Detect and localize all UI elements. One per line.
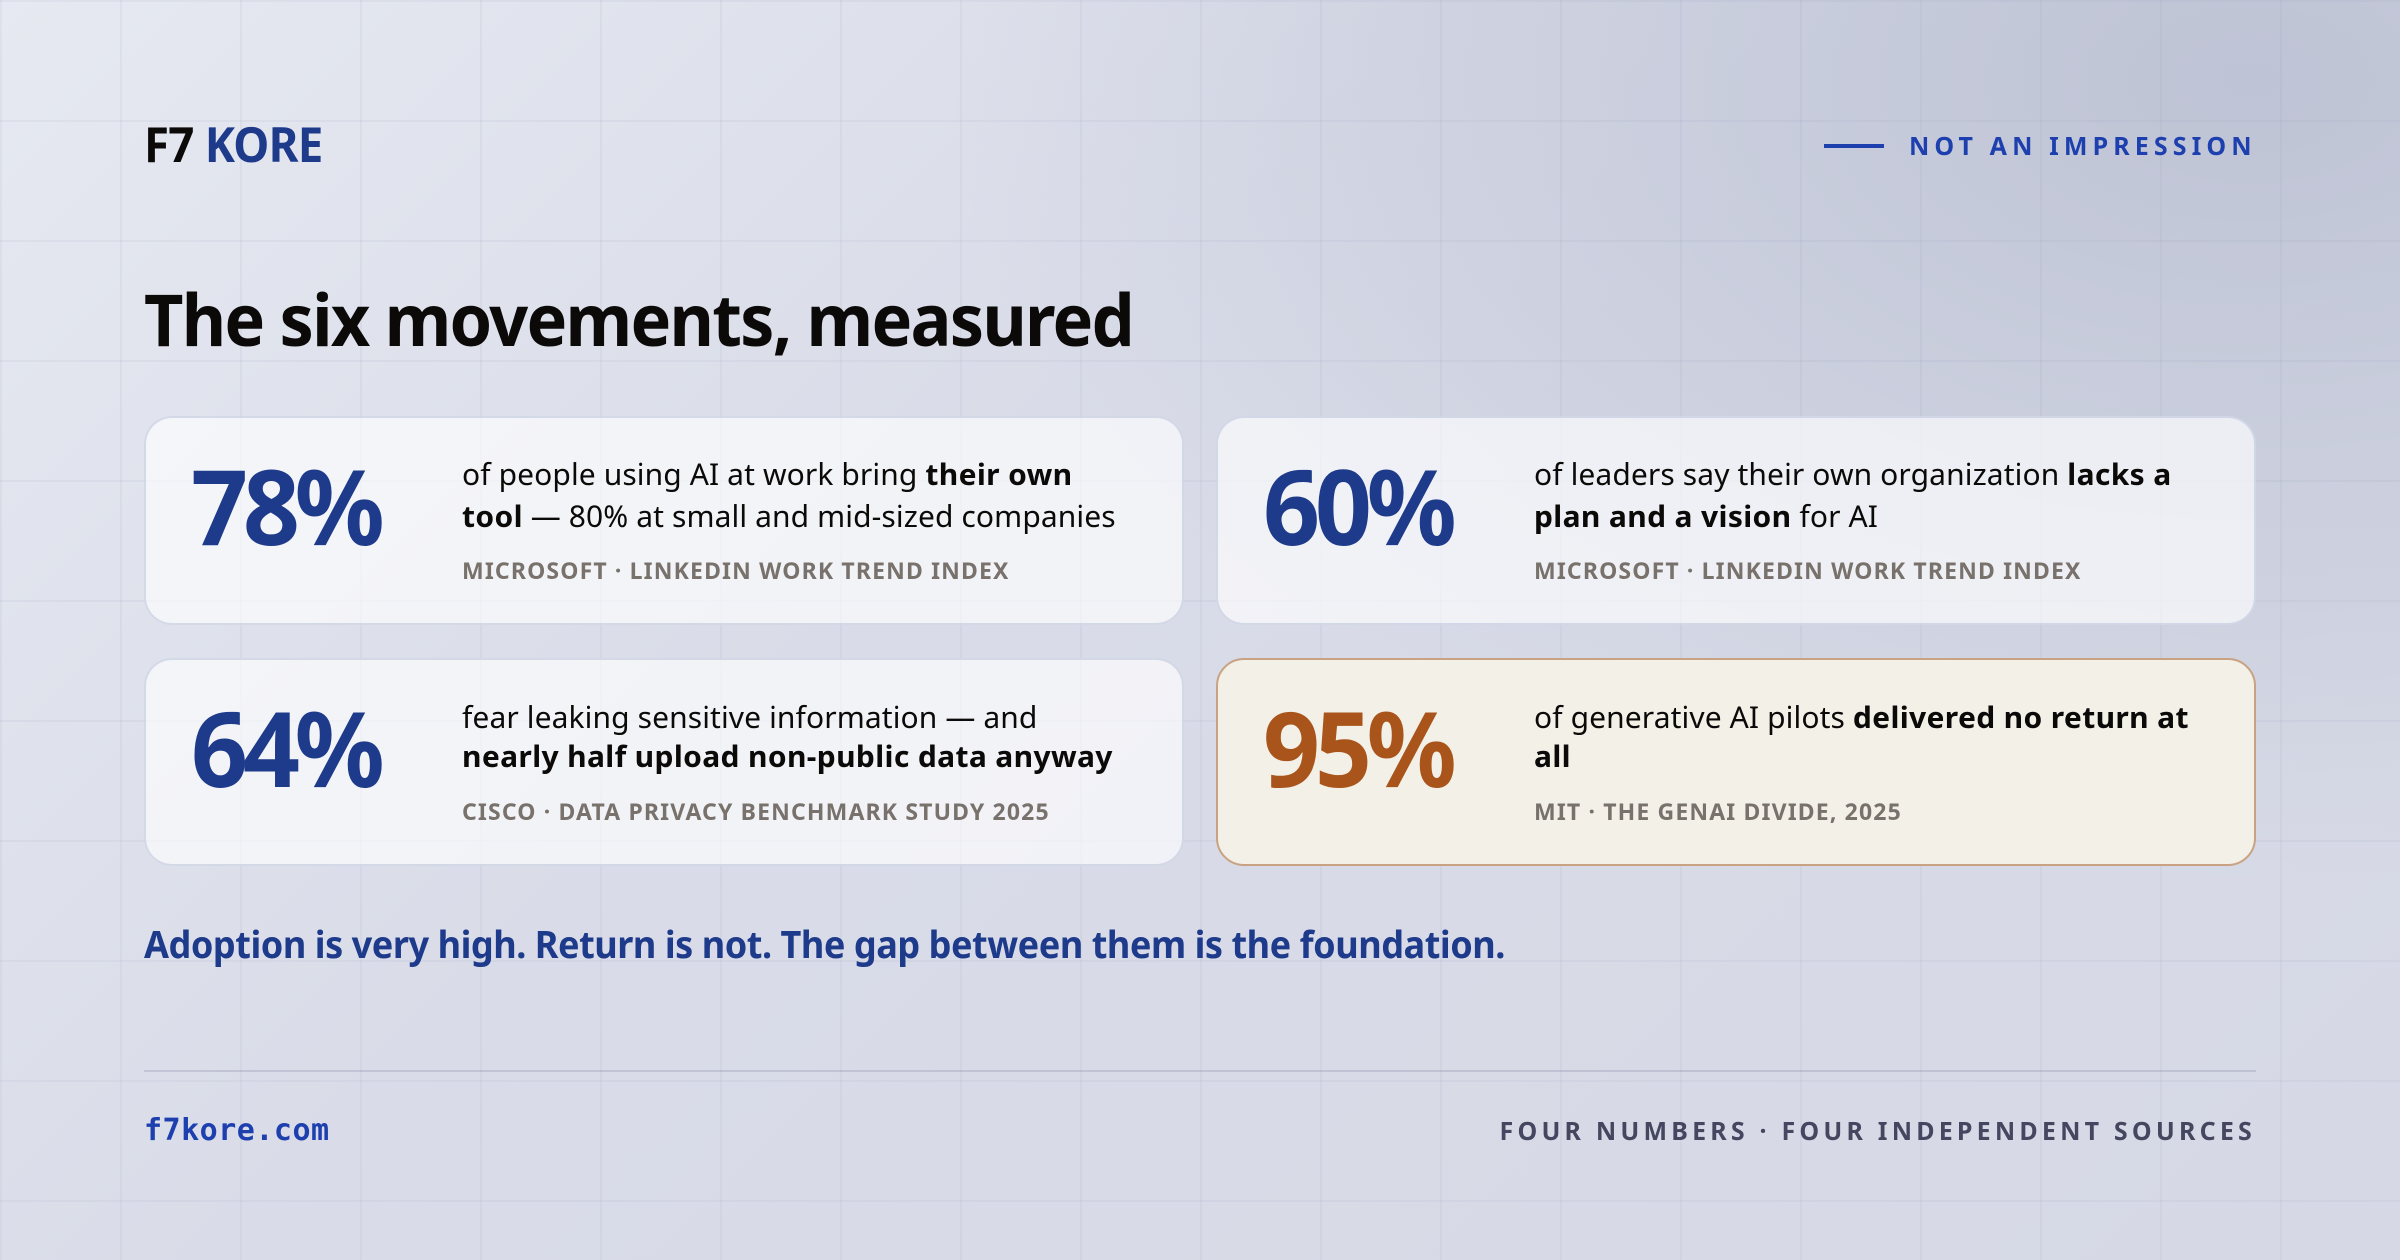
footer url: f7kore.com	[144, 1113, 330, 1148]
stat description: fear leaking sensitive information — and	[462, 696, 1037, 737]
accent line	[1824, 144, 1884, 148]
eyebrow text: NOT AN IMPRESSION	[1909, 129, 2257, 163]
stat number: 64%	[191, 677, 379, 818]
source: MICROSOFT · LINKEDIN WORK TREND INDEX	[462, 554, 1010, 586]
stat description: tool — 80% at small and mid-sized companies	[462, 495, 1116, 536]
stat number: 60%	[1263, 435, 1451, 576]
panel: 78% stat	[144, 416, 1184, 625]
stat description	[462, 453, 1116, 536]
stat description: plan and a vision for AI	[1534, 495, 1878, 536]
stat description: of people using AI at work bring their own	[462, 453, 1072, 494]
stat description: of generative AI pilots delivered no return at	[1534, 696, 2189, 737]
conclusion statement: Adoption is very high. Return is not. The gap between them is the foundation.	[144, 918, 1505, 970]
source: MICROSOFT · LINKEDIN WORK TREND INDEX	[1534, 554, 2082, 586]
stat number: 78%	[191, 435, 379, 576]
stat description: nearly half upload non-public data anyway	[462, 735, 1113, 776]
stat number: 95%	[1263, 677, 1451, 818]
logo: F7 KORE	[144, 112, 323, 177]
footer note: FOUR NUMBERS · FOUR INDEPENDENT SOURCES	[1500, 1114, 2256, 1148]
source: MIT · THE GENAI DIVIDE, 2025	[1534, 795, 1902, 827]
stat description: all	[1534, 735, 1571, 776]
stat description	[1534, 453, 2172, 536]
panel: 64% stat	[144, 658, 1184, 866]
stat description	[462, 696, 1113, 776]
stat description: of leaders say their own organization lacks a	[1534, 453, 2172, 494]
stat description	[1534, 696, 2189, 776]
panel: 95% stat highlighted	[1216, 658, 2256, 866]
source: CISCO · DATA PRIVACY BENCHMARK STUDY 2025	[462, 795, 1050, 827]
panel: 60% stat	[1216, 416, 2256, 625]
eyebrow: not an impression	[1824, 129, 2257, 163]
title: The six movements, measured	[144, 270, 1133, 368]
